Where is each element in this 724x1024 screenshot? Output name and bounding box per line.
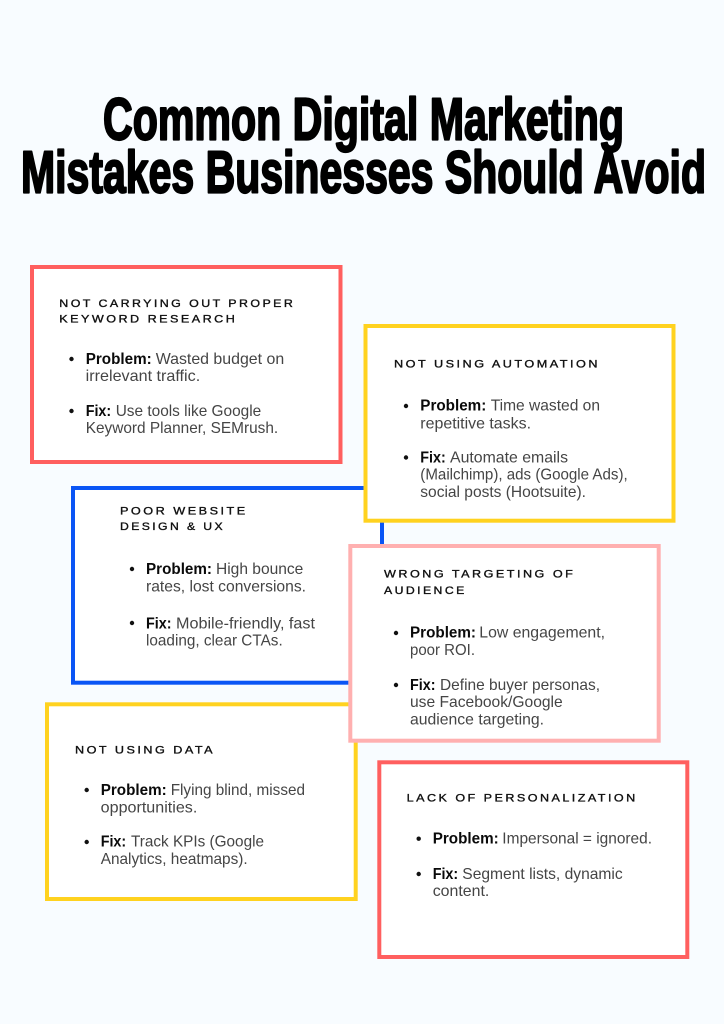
heading: wrong targeting	[384, 569, 575, 597]
fix: not using data: Fix:	[101, 834, 126, 851]
fix: wrong targeting: Define buyer personas,	[440, 677, 600, 694]
problem: not using data	[84, 782, 305, 816]
panel: not using data	[47, 704, 356, 899]
fix: not using data: Track KPIs (Google	[131, 834, 264, 851]
heading: keyword research: KEYWORD RESEARCH	[59, 314, 237, 326]
panel: website design	[73, 488, 382, 683]
heading: keyword research: NOT CARRYING OUT PROPER	[59, 298, 295, 310]
heading: wrong targeting: WRONG TARGETING OF	[384, 569, 575, 581]
problem: personalization: Problem:	[433, 831, 499, 848]
problem: keyword research: irrelevant traffic.	[86, 368, 200, 385]
problem: wrong targeting: Low engagement,	[479, 625, 605, 642]
problem: keyword research: Wasted budget on	[156, 351, 284, 368]
problem: website design: High bounce	[216, 561, 303, 578]
fix: wrong targeting: audience targeting.	[410, 712, 544, 728]
fix: automation	[404, 449, 628, 501]
fix: personalization: content.	[433, 883, 489, 900]
problem: website design: Problem:	[146, 561, 212, 578]
problem: not using data: Flying blind, missed	[171, 782, 305, 799]
heading: automation: NOT USING AUTOMATION	[394, 358, 600, 370]
fix: website design: Fix:	[146, 615, 172, 632]
problem: website design	[130, 561, 306, 596]
fix: not using data: Analytics, heatmaps).	[101, 851, 248, 868]
problem: wrong targeting	[394, 625, 605, 659]
fix: keyword research: Keyword Planner, SEMrush.	[86, 420, 278, 437]
problem: wrong targeting: Problem:	[410, 625, 476, 642]
fix: wrong targeting	[394, 677, 600, 728]
problem: automation: repetitive tasks.	[420, 415, 531, 432]
heading: not using data: NOT USING DATA	[75, 744, 215, 756]
panel: personalization	[379, 762, 687, 957]
panel: automation	[366, 326, 674, 521]
heading: website design	[120, 505, 248, 533]
fix: keyword research	[69, 403, 278, 437]
problem: not using data: opportunities.	[101, 800, 197, 816]
fix: wrong targeting: Fix:	[410, 677, 436, 694]
problem: personalization: Impersonal = ignored.	[502, 831, 652, 848]
problem: keyword research	[69, 351, 284, 385]
heading: personalization: LACK OF PERSONALIZATION	[407, 793, 638, 805]
fix: personalization: Fix:	[433, 866, 458, 883]
panel: wrong targeting	[350, 546, 659, 741]
panel: keyword research	[32, 267, 340, 462]
fix: automation: Fix:	[420, 449, 446, 466]
heading: wrong targeting: AUDIENCE	[384, 585, 467, 597]
problem: keyword research: Problem:	[86, 351, 152, 368]
heading: keyword research	[59, 298, 295, 326]
problem: automation	[404, 398, 600, 432]
fix: website design: Mobile-friendly, fast	[176, 615, 316, 632]
fix: personalization	[416, 866, 623, 900]
fix: website design	[130, 615, 316, 650]
problem: wrong targeting: poor ROI.	[410, 642, 475, 659]
fix: automation: social posts (Hootsuite).	[420, 484, 586, 501]
problem: personalization	[416, 831, 652, 848]
fix: keyword research: Fix:	[86, 403, 111, 420]
problem: website design: rates, lost conversions.	[146, 578, 306, 596]
fix: keyword research: Use tools like Google	[116, 403, 261, 420]
problem: automation: Problem:	[420, 398, 486, 415]
problem: not using data: Problem:	[101, 782, 167, 799]
title	[21, 86, 706, 206]
fix: not using data	[84, 834, 264, 868]
fix: website design: loading, clear CTAs.	[146, 632, 283, 650]
fix: automation: (Mailchimp), ads (Google Ads),	[420, 466, 628, 484]
fix: personalization: Segment lists, dynamic	[462, 866, 623, 883]
problem: automation: Time wasted on	[491, 398, 600, 415]
heading: website design: POOR WEBSITE	[120, 505, 248, 517]
fix: wrong targeting: use Facebook/Google	[410, 694, 563, 711]
fix: automation: Automate emails	[450, 449, 568, 466]
heading: website design: DESIGN & UX	[120, 521, 225, 533]
